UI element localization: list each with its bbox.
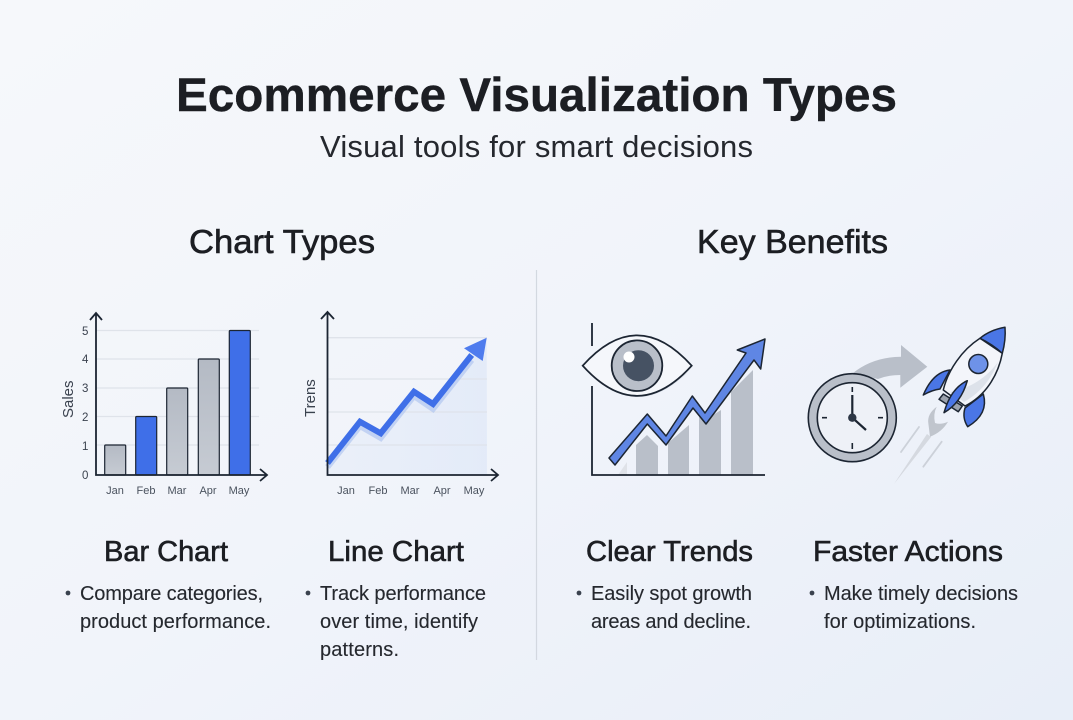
heading: key benefits: Key Benefits [697,223,888,260]
bars [105,330,250,475]
trend line [328,355,472,463]
card text: bar chart: Bar Chart [104,536,228,568]
y axis numbers: 1 [82,441,88,453]
card text: line chart: patterns. [320,639,399,661]
y axis numbers: 2 [82,412,88,424]
card text: clear trends: Clear Trends [586,536,753,568]
chart axes [592,323,765,475]
growth bars [618,370,753,475]
x axis months: Jan [106,485,124,497]
card text: clear trends: areas and decline. [591,611,751,633]
x axis months: Feb [369,485,387,497]
flame [928,407,948,437]
card text: faster actions [810,536,1018,633]
card text: bar chart: Compare categories, [80,583,263,605]
clock [808,374,896,462]
eye outline [583,335,692,396]
x axis months [337,485,485,497]
x axis months: Apr [433,485,451,497]
x axis months: May [464,485,485,497]
axes [321,312,498,481]
y axis numbers: 0 [82,470,88,482]
rocket [923,327,1005,427]
x axis months [106,485,250,497]
card text: faster actions: for optimizations. [824,611,976,633]
trend line shadow [328,360,472,467]
x axis months: Mar [401,485,420,497]
heading: chart types: Chart Types [189,223,375,260]
panel: line chart [302,312,498,497]
card text: bar chart: product performance. [80,611,271,633]
eye shadow [590,372,688,397]
icon: clock and rocket [808,327,1005,484]
y axis numbers: 3 [82,383,88,395]
title: Ecommerce Visualization Types [176,68,897,121]
iris [612,340,662,391]
x axis months: Mar [168,485,187,497]
x axis months: May [229,485,250,497]
card text: line chart: Track performance [320,583,486,605]
card text: line chart [306,536,486,661]
card text: clear trends [577,536,753,633]
y axis numbers: 5 [82,326,88,338]
x axis months: Apr [199,485,217,497]
card text: line chart: Line Chart [328,536,464,568]
eye highlight [624,352,634,362]
axes [90,313,267,481]
card text: clear trends: Easily spot growth [591,583,752,605]
card text: bar chart [66,536,271,633]
x axis months: Jan [337,485,355,497]
y axis label: Sales [60,380,77,418]
speed lines [894,427,942,484]
card text: faster actions: Make timely decisions [824,583,1018,605]
subtitle: Visual tools for smart decisions [320,129,753,164]
trend arrowhead [464,338,487,361]
x axis months: Feb [137,485,155,497]
icon: eye and growth chart [583,323,765,475]
panel: bar chart [60,313,267,497]
y axis numbers [82,326,89,482]
card text: line chart: over time, identify [320,611,478,633]
card text: faster actions: Faster Actions [813,536,1003,568]
pupil [623,350,654,381]
y axis numbers: 4 [82,354,89,366]
y axis label: Trens [302,379,319,417]
growth arrow [609,339,765,465]
grey arrow [853,345,927,388]
